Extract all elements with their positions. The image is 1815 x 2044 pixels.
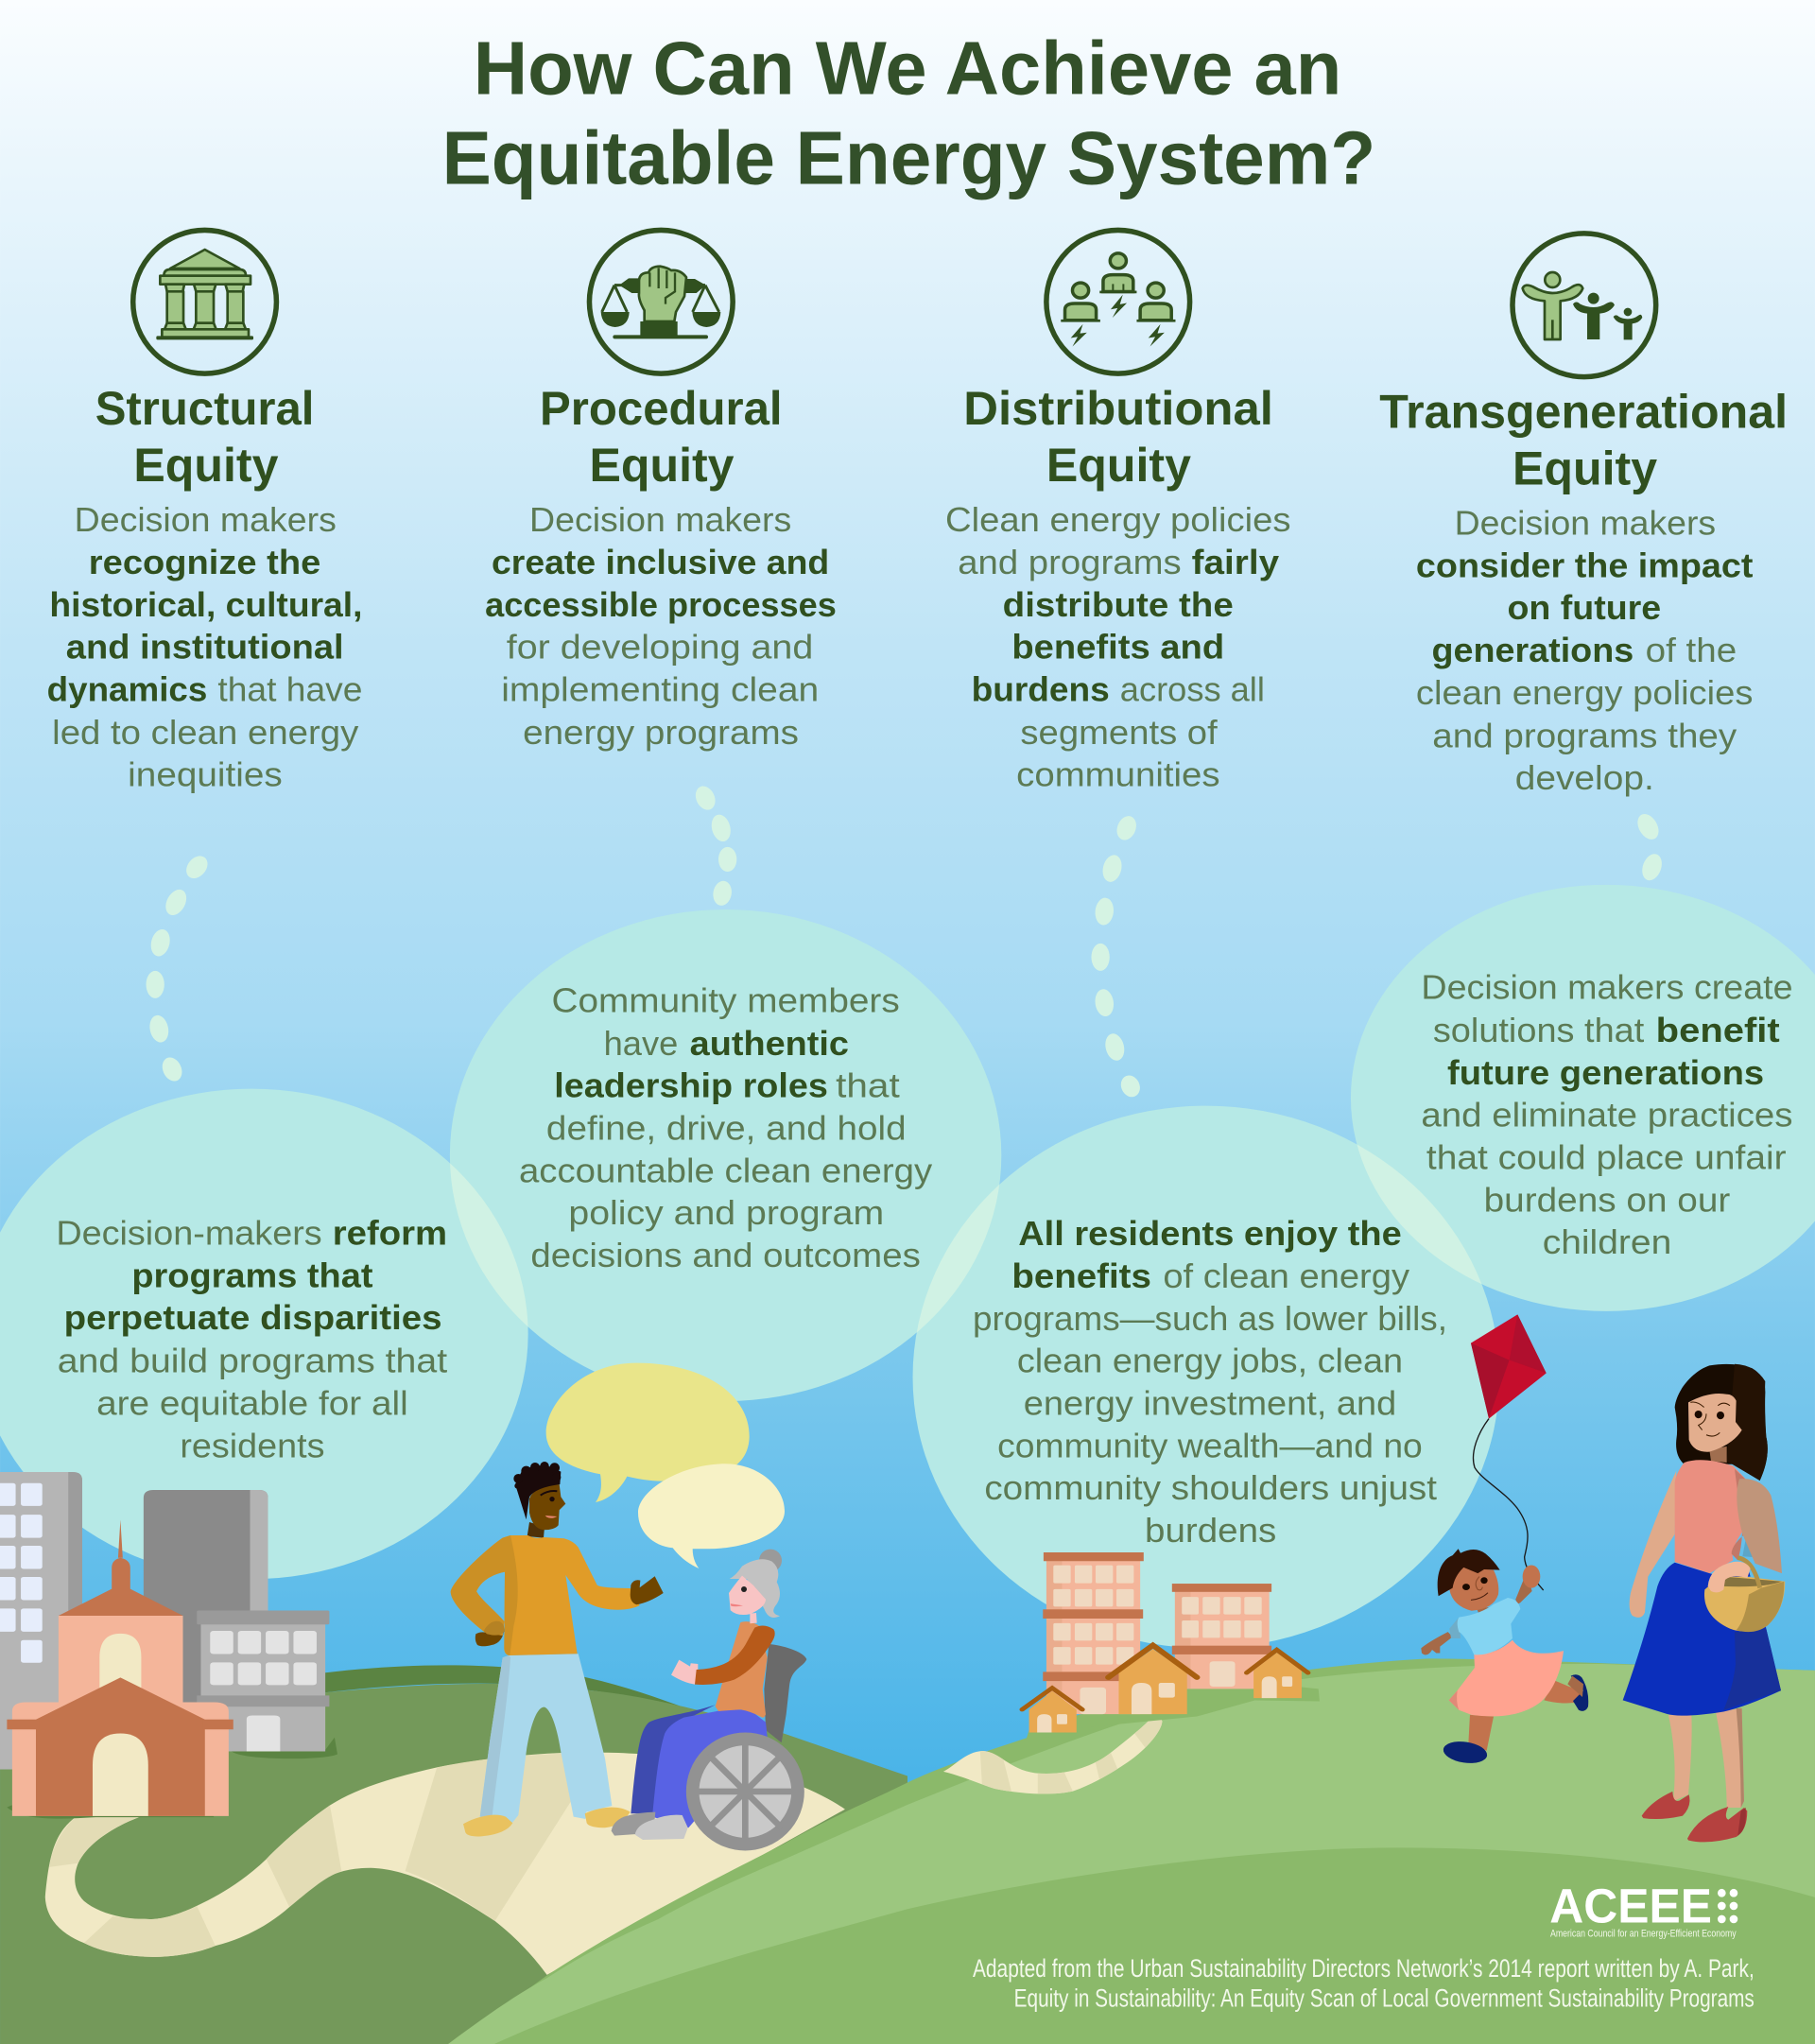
bubble: procedural outcome: accountable clean energy	[519, 1152, 932, 1189]
text: distributional equity description	[945, 501, 1291, 794]
bubble: structural outcome	[0, 1089, 528, 1579]
heading: transgenerational equity: Transgenerational	[1379, 385, 1788, 438]
figure: mother	[1623, 1364, 1785, 1842]
figure: woman in wheelchair	[612, 1550, 806, 1845]
panel: procedural equity	[485, 230, 837, 752]
bubble: distributional outcome: community shoulders unjust	[984, 1469, 1437, 1507]
text: distributional equity description: burdens	[972, 670, 1110, 708]
heading: procedural equity	[540, 382, 783, 492]
text: transgenerational equity description: on future	[1507, 589, 1661, 627]
low gray building	[197, 1610, 337, 1758]
bubble: distributional outcome: All residents enjoy the	[1018, 1215, 1402, 1253]
text: transgenerational equity description: clean energy policies	[1416, 674, 1753, 712]
logo: ACEEE: ACEEE	[1549, 1879, 1712, 1932]
bubble: structural outcome: are equitable for all	[96, 1385, 408, 1423]
panel: structural equity	[47, 230, 362, 794]
bubble: distributional outcome: benefits	[1011, 1257, 1151, 1295]
text: structural equity description: historical, cultural,	[49, 586, 362, 624]
text: structural equity description: led to clean energy	[52, 714, 358, 752]
bubble: transgenerational outcome: benefit	[1656, 1012, 1780, 1049]
bubble: transgenerational outcome: that could place unfair	[1426, 1139, 1787, 1177]
text: transgenerational equity description: and programs they	[1432, 717, 1737, 754]
text: distributional equity description: across all	[1120, 670, 1265, 708]
grass	[1027, 1682, 1320, 1740]
bubble: procedural outcome: that	[836, 1067, 900, 1105]
text: transgenerational equity description: generations	[1431, 632, 1634, 669]
text: structural equity description: inequities	[128, 756, 283, 794]
figure: child	[1421, 1549, 1588, 1766]
bubble: procedural outcome: define, drive, and hold	[546, 1109, 907, 1147]
bubble: transgenerational outcome: and eliminate practices	[1421, 1097, 1793, 1135]
text: procedural equity description: for developing and	[507, 629, 813, 667]
bubble: transgenerational outcome: burdens on our	[1484, 1181, 1730, 1219]
bubble: procedural outcome: decisions and outcomes	[530, 1237, 921, 1274]
people and speech bubbles	[451, 1363, 806, 1845]
heading: distributional equity: Equity	[1046, 439, 1191, 492]
bubble: structural outcome: reform	[333, 1215, 447, 1253]
dark gray tower	[144, 1490, 268, 1706]
right scene buildings	[943, 1552, 1320, 1797]
kite	[1471, 1314, 1547, 1590]
bubble: transgenerational outcome: future generations	[1447, 1054, 1764, 1092]
heading: distributional equity: Distributional	[963, 382, 1273, 435]
icon: fist and scales	[589, 230, 733, 373]
bubble: distributional outcome: clean energy jobs, clean	[1017, 1342, 1403, 1380]
bubble: transgenerational outcome	[1351, 885, 1815, 1311]
text: structural equity description: Decision makers	[75, 501, 337, 539]
text: distributional equity description: Clean energy policies	[945, 501, 1291, 539]
heading: distributional equity	[963, 382, 1273, 492]
text: distributional equity description: fairly	[1192, 544, 1279, 581]
text: transgenerational equity description	[1416, 504, 1754, 797]
road continuation	[943, 1720, 1163, 1794]
icon: three generations	[1512, 234, 1656, 377]
bubble: structural outcome: and build programs that	[58, 1342, 447, 1380]
bubble: procedural outcome	[450, 909, 1001, 1401]
heading: transgenerational equity	[1379, 385, 1788, 494]
text: distributional equity description: communities	[1016, 756, 1220, 794]
text: transgenerational equity description: consider the impact	[1416, 546, 1754, 584]
text: distributional equity description: benefits and	[1011, 629, 1224, 667]
icon: people with energy bolts	[1046, 230, 1190, 373]
bubble: procedural outcome: policy and program	[568, 1194, 884, 1232]
dotted connectors	[147, 783, 1666, 1100]
back hills	[0, 1665, 908, 2044]
text: procedural equity description: implementing clean	[501, 670, 819, 708]
heading: structural equity: Equity	[133, 439, 279, 492]
front hills	[447, 1658, 1815, 2044]
houses	[1022, 1645, 1308, 1733]
heading: structural equity	[95, 382, 314, 492]
icon: government building	[133, 230, 276, 373]
bubble: distributional outcome: programs—such as lower bills,	[973, 1300, 1447, 1338]
text: procedural equity description: Decision makers	[529, 501, 791, 539]
logo: ACEEE: American Council for an Energy-Efficient Economy	[1550, 1928, 1737, 1939]
bubble overlaps	[450, 885, 1815, 1401]
bubble: structural outcome: Decision-makers	[56, 1215, 322, 1253]
text: transgenerational equity description: of the	[1646, 632, 1737, 669]
text: transgenerational equity description: develop.	[1515, 759, 1654, 797]
bubble: distributional outcome: energy investment, and	[1024, 1385, 1396, 1423]
text: structural equity description: dynamics	[47, 670, 207, 708]
text: structural equity description	[47, 501, 362, 794]
text: distributional equity description: and programs	[958, 544, 1182, 581]
left scene: city, church and road	[0, 1472, 845, 1975]
text: distributional equity description: segments of	[1020, 714, 1219, 752]
speech bubble: yellow	[546, 1363, 750, 1502]
figure: man	[451, 1462, 664, 1836]
bubble: procedural outcome: leadership roles	[554, 1067, 828, 1105]
text: structural equity description: recognize the	[89, 544, 320, 581]
road	[45, 1753, 845, 1975]
text: procedural equity description: accessible processes	[485, 586, 837, 624]
bubble: structural outcome: perpetuate disparities	[64, 1299, 442, 1337]
bubble: distributional outcome: burdens	[1145, 1512, 1276, 1550]
bubble: transgenerational outcome: children	[1543, 1223, 1671, 1261]
bubble: structural outcome: residents	[180, 1427, 324, 1464]
speech bubble: cream	[638, 1464, 785, 1568]
bubble: transgenerational outcome: solutions that	[1433, 1012, 1644, 1049]
panel: distributional equity	[945, 230, 1291, 794]
bubble: transgenerational outcome: Decision makers create	[1421, 969, 1793, 1007]
bubble: procedural outcome: Community members	[551, 981, 900, 1019]
apartment buildings	[1043, 1552, 1271, 1714]
text: distributional equity description: distribute the	[1003, 586, 1234, 624]
bubble: distributional outcome: community wealth—and no	[997, 1427, 1423, 1464]
heading: transgenerational equity: Equity	[1512, 442, 1657, 494]
text: procedural equity description: energy programs	[523, 714, 799, 752]
text: procedural equity description: create inclusive and	[492, 544, 829, 581]
text: procedural equity description	[485, 501, 837, 752]
bubble: distributional outcome: of clean energy	[1163, 1257, 1409, 1295]
heading: structural equity: Structural	[95, 382, 314, 435]
panel: transgenerational equity	[1379, 234, 1788, 797]
title: Equitable Energy System?	[442, 115, 1375, 199]
title: How Can We Achieve an	[474, 26, 1341, 110]
bubble: structural outcome: programs that	[131, 1256, 373, 1294]
bubble: distributional outcome	[913, 1106, 1499, 1648]
kite, child and mother	[1421, 1314, 1785, 1842]
text: structural equity description: that have	[217, 670, 362, 708]
text: structural equity description: and institutional	[66, 629, 344, 667]
heading: procedural equity: Procedural	[540, 382, 783, 435]
text: transgenerational equity description: Decision makers	[1455, 504, 1716, 542]
tall gray building	[0, 1472, 82, 1769]
church	[7, 1520, 233, 1819]
bubble: procedural outcome: authentic	[690, 1025, 849, 1063]
title	[442, 26, 1375, 199]
bubble: procedural outcome: have	[604, 1025, 678, 1063]
heading: procedural equity: Equity	[589, 439, 735, 492]
source credit	[973, 1954, 1754, 2013]
